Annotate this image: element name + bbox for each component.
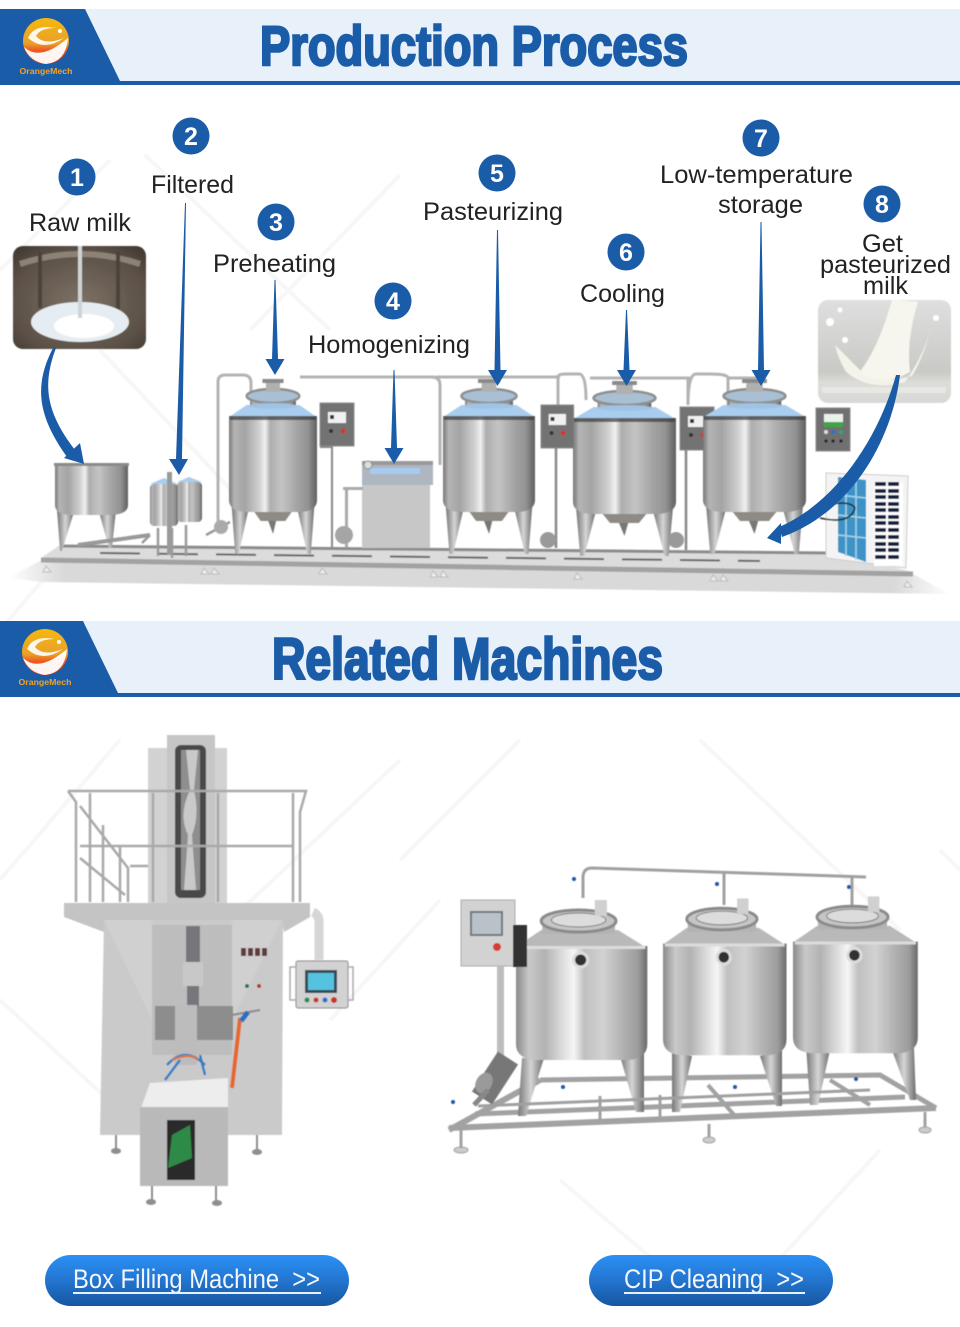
icon: OrangeMech logo: OrangeMech: [18, 678, 72, 687]
step 4: homogenizing: [308, 282, 470, 464]
photo: pasteurized milk splash: [818, 300, 951, 403]
tank 2: [663, 898, 786, 1055]
logo tab: [0, 621, 118, 693]
number badge 2: 2: [184, 123, 198, 151]
machine: filter: [142, 472, 230, 558]
number badge 6: [608, 234, 644, 270]
control box: storage: [816, 408, 850, 451]
number badge 5: 5: [490, 160, 504, 188]
label line 3: milk: [863, 272, 909, 300]
button: CIP Cleaning: [589, 1255, 833, 1306]
button label: Box Filling Machine >>: [73, 1264, 320, 1294]
step 1: raw milk: [29, 158, 131, 237]
label: Cooling: [580, 280, 665, 308]
panel: box filling machine: [64, 735, 353, 1205]
number badge 1: 1: [70, 164, 84, 192]
pump and column: [472, 966, 870, 1106]
header: Related Machines: [0, 621, 960, 697]
label: Preheating: [213, 250, 336, 278]
number badge 5: [478, 154, 516, 192]
frame rails: [41, 545, 913, 574]
header: Production Process: [0, 9, 960, 85]
tank: preheating: [229, 379, 317, 554]
step 2: filtered: [151, 118, 234, 475]
pipe arm: [313, 912, 319, 960]
machine: feed tank: [54, 463, 150, 551]
touch panel: [290, 961, 353, 1008]
tank 1: [516, 900, 647, 1060]
icon: OrangeMech logo: OrangeMech: [20, 67, 73, 76]
control box: cooling: [680, 407, 714, 450]
icon: OrangeMech logo: [18, 629, 72, 687]
title: Production Process: [260, 14, 688, 77]
arrow: raw milk to tank: [41, 348, 84, 464]
button label: CIP Cleaning >>: [624, 1264, 804, 1294]
header band: [0, 621, 960, 693]
frame: [449, 1075, 936, 1153]
control box: preheating: [320, 403, 354, 446]
step 5: pasteurizing: [423, 154, 563, 386]
tank: storage: [703, 379, 806, 554]
arrow: [266, 280, 284, 375]
number badge 3: 3: [269, 209, 283, 237]
support feet: [112, 1135, 261, 1205]
number badge 4: [374, 282, 412, 320]
machine: process line: [8, 374, 950, 594]
number badge 4: 4: [386, 288, 400, 316]
arrow: storage to milk: [767, 375, 900, 544]
header rule: [0, 693, 960, 697]
panel: production line: [8, 118, 951, 594]
control cabinet: [461, 900, 527, 967]
label: Get: [862, 230, 903, 258]
underline: [624, 1292, 805, 1294]
icon: OrangeMech logo: [20, 18, 73, 76]
step 8: get pasteurized milk: [820, 186, 951, 300]
blue valve handles: [451, 877, 858, 1104]
outfeed unit: [140, 1078, 228, 1186]
floor: [8, 560, 950, 594]
arrow: [617, 310, 636, 386]
arrow: [488, 230, 507, 386]
header rule: [0, 81, 960, 85]
underline: [73, 1292, 321, 1294]
panel: CIP cleaning system: [449, 868, 936, 1153]
title: Related Machines: [272, 627, 663, 692]
label: Pasteurizing: [423, 198, 563, 226]
number badge 8: 8: [875, 191, 889, 219]
arrow: [384, 370, 404, 464]
photo: raw milk tank: [13, 246, 146, 349]
label: Homogenizing: [308, 331, 470, 359]
label line 2: pasteurized: [820, 251, 951, 279]
logo tab: [0, 9, 120, 81]
tank legs: [518, 1045, 916, 1116]
arrow: [169, 203, 188, 475]
overhead pipes: [218, 374, 765, 525]
number badge 7: 7: [754, 125, 768, 153]
step 7: low-temperature storage: [660, 120, 853, 386]
control box: pasteurizing: [541, 405, 574, 448]
feet: [43, 566, 912, 587]
label: Filtered: [151, 171, 234, 199]
step 6: cooling: [580, 234, 665, 386]
tank: pasteurizing: [443, 379, 535, 554]
platform: [64, 903, 310, 932]
button: Box Filling Machine: [45, 1255, 349, 1306]
cabinet body: [100, 920, 283, 1135]
number badge 2: [172, 118, 210, 154]
tank 3: [793, 896, 918, 1053]
label: Raw milk: [29, 209, 131, 237]
machine: homogenizer: [335, 461, 433, 548]
step 3: preheating: [213, 204, 336, 375]
railing: [68, 791, 306, 902]
top pipe: [583, 868, 866, 905]
label: Low-temperature: [660, 161, 853, 189]
header band: [0, 9, 960, 81]
machine: condenser: [820, 473, 908, 568]
label line 2: storage: [718, 191, 803, 219]
number badge 6: 6: [619, 239, 633, 267]
tank: cooling: [573, 381, 676, 556]
tower: [148, 735, 227, 903]
number badge 3: [258, 204, 294, 240]
arrow: [752, 222, 770, 386]
number badge 7: [742, 120, 780, 156]
